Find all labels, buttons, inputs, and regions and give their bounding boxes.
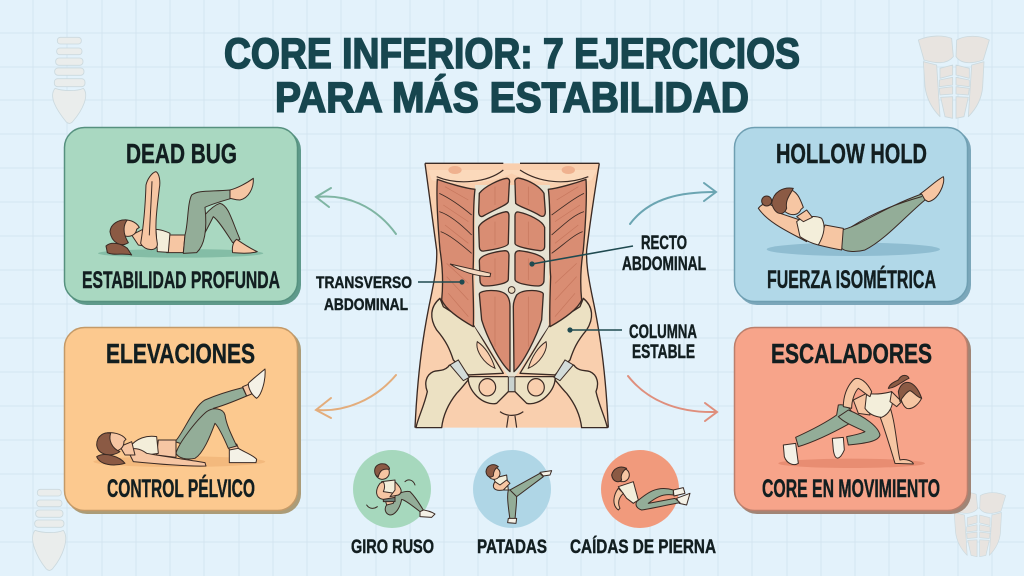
label: giro ruso: GIRO RUSO [351,537,434,558]
callout: transverso abdominal: TRANSVERSO [316,273,412,292]
body silhouette [415,163,608,428]
arrow: to dead bug [316,188,396,234]
heading: escaladores: ESCALADORES [771,338,932,369]
anatomy: abdominal illustration [415,163,608,428]
heading: elevaciones: ELEVACIONES [106,338,255,369]
label: patadas: PATADAS [477,537,547,558]
callout: transverso abdominal: ABDOMINAL [324,295,408,314]
icon: spine top-left [53,37,86,123]
icon: caídas figure [612,467,690,510]
icon: torso top-right [918,36,989,118]
heading: dead bug: DEAD BUG [126,138,237,169]
icon: patadas figure [486,465,552,523]
illustration: dead bug figure [98,172,263,258]
panel: hollow hold [734,128,971,305]
exercise: patadas [473,450,552,528]
arrow: to elevaciones [316,375,396,418]
panel: elevaciones [64,328,301,514]
icon: torso bottom-right [950,492,1006,557]
illustration: escaladores figure [778,375,925,468]
callout: transverso abdominal [316,273,465,314]
callout: columna estable: COLUMNA [629,322,697,343]
title: PARA MÁS ESTABILIDAD [275,74,749,122]
callout: recto abdominal: ABDOMINAL [622,254,706,275]
callout: columna estable [567,322,697,363]
rectus abdominis [450,178,545,372]
title: CORE INFERIOR: 7 EJERCICIOS [224,30,800,78]
icon: spine bottom-left [33,489,66,570]
subtitle: elevaciones: CONTROL PÉLVICO [107,474,255,503]
arrow: to hollow hold [630,183,716,224]
panel: dead bug [64,128,301,305]
subtitle: hollow hold: FUERZA ISOMÉTRICA [767,265,936,294]
arrow: to escaladores [628,376,717,421]
exercise: giro ruso [353,450,435,528]
oblique muscles [437,170,588,327]
label: caídas de pierna: CAÍDAS DE PIERNA [570,536,716,558]
callout: recto abdominal [529,233,706,275]
icon: giro ruso figure [367,464,435,517]
subtitle: dead bug: ESTABILIDAD PROFUNDA [82,267,280,294]
exercise: caídas de pierna [601,450,690,528]
illustration: elevaciones figure [93,369,265,467]
callout: recto abdominal: RECTO [641,233,687,254]
title [224,30,800,122]
panel: escaladores [734,328,971,514]
illustration: hollow hold figure [758,177,944,256]
pelvis bones [416,298,607,428]
heading: hollow hold: HOLLOW HOLD [776,138,927,169]
callout: columna estable: ESTABLE [632,342,695,363]
